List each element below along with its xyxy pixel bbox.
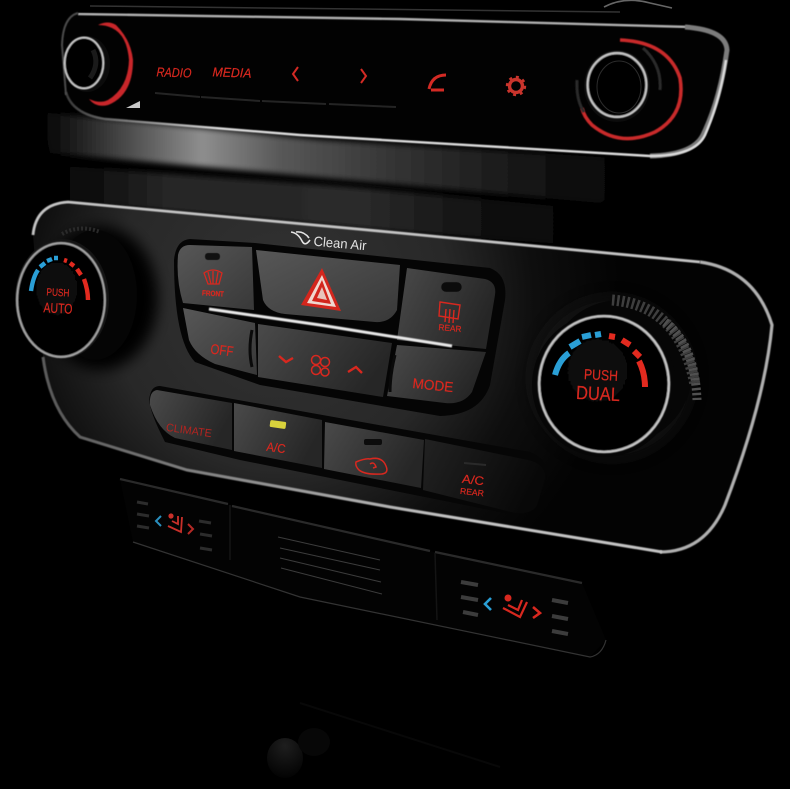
lower console band xyxy=(50,165,640,250)
button: hazard xyxy=(256,250,400,322)
left seat switch xyxy=(137,502,212,550)
button: fan speed xyxy=(258,324,392,397)
RADIO key: RADIO xyxy=(156,64,192,81)
red scale xyxy=(64,260,88,300)
fan up arrow xyxy=(348,367,362,373)
button: front defrost xyxy=(178,245,254,310)
right temperature knob: DUAL xyxy=(575,383,620,406)
button cluster lower surround xyxy=(149,386,547,514)
indicator xyxy=(464,463,486,465)
button: a/c rear xyxy=(423,439,545,513)
button cluster upper surround xyxy=(174,239,505,416)
pointer triangle xyxy=(126,101,140,108)
panel top edges xyxy=(120,479,582,583)
hazard triangle xyxy=(301,268,341,311)
MEDIA key: MEDIA xyxy=(212,64,252,81)
fan down arrow xyxy=(279,356,293,362)
button: a/c: A/C xyxy=(266,440,286,456)
right tuning ring xyxy=(577,40,681,139)
button: off xyxy=(183,308,257,375)
gear shifter area xyxy=(267,703,500,778)
left volume ring xyxy=(64,22,140,108)
button: rear defrost: REAR xyxy=(438,322,462,334)
knurled ring xyxy=(548,300,692,444)
right temperature knob: PUSH xyxy=(584,367,618,385)
yellow indicator xyxy=(270,420,286,429)
panel: seat controls xyxy=(120,479,606,657)
clean air logo xyxy=(291,232,368,253)
bezel chrome right xyxy=(650,27,727,156)
bezel chrome top xyxy=(78,14,690,27)
fascia body xyxy=(33,202,772,552)
panel bottom edge xyxy=(133,542,606,657)
indicator xyxy=(205,253,220,260)
right temperature knob xyxy=(530,296,697,460)
clean air logo: Clean Air xyxy=(313,234,368,253)
indicator xyxy=(441,282,462,292)
right seat switch xyxy=(461,582,568,634)
chrome strip xyxy=(209,309,452,346)
left temperature knob xyxy=(15,226,158,370)
phone icon xyxy=(429,75,446,90)
chrome right edge xyxy=(660,262,772,552)
blue scale xyxy=(555,334,601,375)
indicator xyxy=(364,439,382,445)
fan icon xyxy=(312,356,330,376)
previous arrow xyxy=(293,67,298,81)
rear defrost icon xyxy=(439,302,460,323)
center vent slats xyxy=(278,537,382,594)
top right small arc xyxy=(604,0,672,8)
next arrow xyxy=(361,69,366,83)
radio bezel xyxy=(63,13,728,156)
button: rear defrost xyxy=(397,268,495,349)
chrome top edge xyxy=(33,202,700,262)
blue scale xyxy=(31,258,58,291)
car icon xyxy=(356,458,387,474)
chrome lower edge xyxy=(43,357,662,552)
button: climate xyxy=(150,390,232,450)
radio soft keys xyxy=(155,64,525,107)
defrost icon xyxy=(204,270,222,284)
button: a/c rear: A/C xyxy=(461,472,485,488)
button: mode xyxy=(387,345,486,403)
panel: climate control fascia xyxy=(15,202,772,552)
button: a/c xyxy=(234,403,322,468)
red scale xyxy=(609,336,645,387)
left temperature knob: PUSH xyxy=(46,286,70,300)
button: a/c rear: REAR xyxy=(460,486,484,498)
settings gear icon xyxy=(507,77,525,95)
button: mode: MODE xyxy=(412,375,454,395)
panel body xyxy=(120,479,606,657)
grey console band below radio xyxy=(40,112,660,203)
left temperature knob: AUTO xyxy=(43,299,73,317)
button: front defrost: FRONT xyxy=(202,288,225,299)
bezel chrome left xyxy=(62,13,78,95)
button: recirculation xyxy=(324,422,424,488)
key separators xyxy=(155,93,396,107)
bezel chrome bottom xyxy=(66,60,726,156)
button: climate: CLIMATE xyxy=(165,422,212,440)
button: off: OFF xyxy=(210,341,234,359)
